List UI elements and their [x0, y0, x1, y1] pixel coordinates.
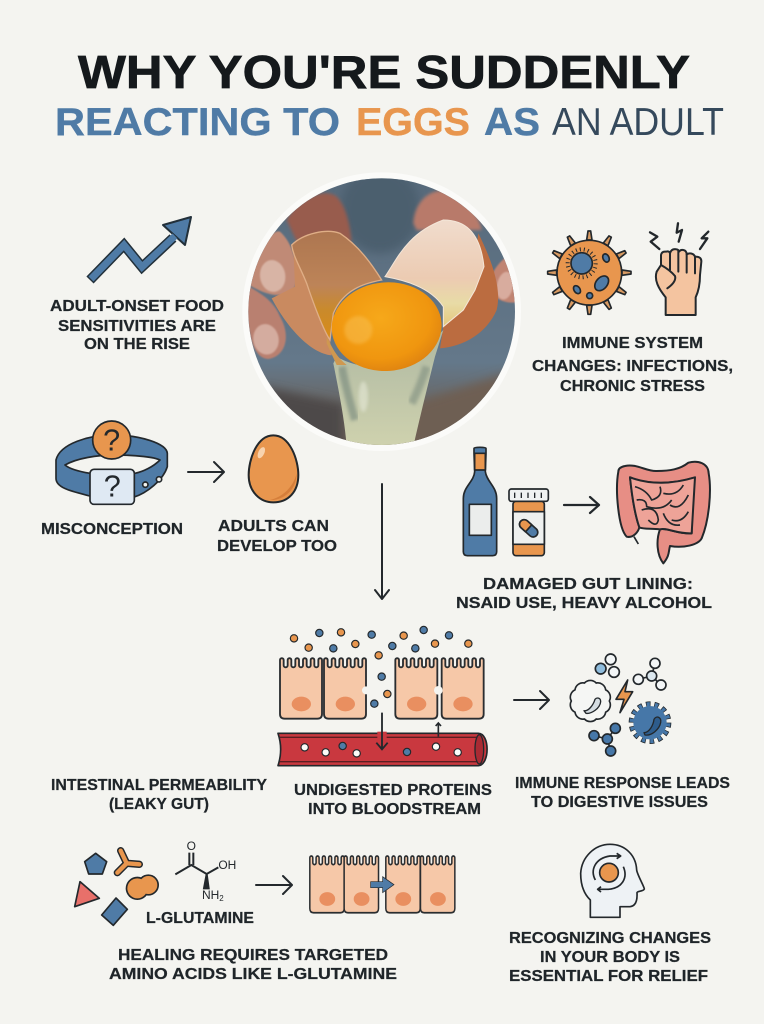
text: recognizing changes — [509, 930, 711, 985]
icon: L-glutamine molecule — [175, 839, 236, 903]
title — [55, 46, 724, 144]
text: healing requires amino acids: AMINO ACIDS LIKE L-GLUTAMINE — [109, 966, 397, 983]
arrow: misconception to egg — [188, 462, 224, 482]
text: adults can develop too — [217, 518, 337, 555]
text: adults can develop too: DEVELOP TOO — [217, 538, 337, 555]
diagram: leaky gut cells and bloodstream — [278, 626, 487, 766]
icon: question-mark wristband — [56, 421, 167, 504]
text: undigested proteins: INTO BLOODSTREAM — [308, 801, 481, 818]
icon: virus — [548, 231, 631, 314]
photo: cracking egg in circle — [242, 167, 523, 453]
text: intestinal permeability: INTESTINAL PERMEABILITY — [51, 777, 268, 794]
arrow: L-glutamine to healed cells — [256, 876, 292, 894]
text: undigested proteins: UNDIGESTED PROTEINS — [294, 782, 492, 799]
icon: head with cycle — [581, 844, 644, 917]
text: immune system changes: CHANGES: INFECTIONS, — [532, 358, 733, 375]
text: recognizing changes: IN YOUR BODY IS — [540, 949, 680, 966]
icon: intestines — [617, 462, 710, 563]
icon: L-glutamine molecule: O — [187, 839, 196, 853]
title: EGGS — [356, 101, 470, 144]
proteins above gut wall — [290, 626, 472, 707]
icon: egg — [249, 435, 298, 502]
arrow: medication to gut — [564, 497, 599, 513]
text: damaged gut lining — [456, 576, 712, 612]
text: intestinal permeability — [51, 777, 268, 813]
text: damaged gut lining: NSAID USE, HEAVY ALCOHOL — [456, 595, 712, 612]
text: L-glutamine label: L-GLUTAMINE — [146, 910, 254, 927]
title: AN ADULT — [552, 101, 724, 144]
icon: pill bottle — [509, 489, 548, 556]
text: adult-onset sensitivities: ON THE RISE — [84, 336, 190, 353]
text: damaged gut lining: DAMAGED GUT LINING: — [483, 576, 693, 593]
text: immune system changes: IMMUNE SYSTEM — [562, 335, 703, 352]
text: adults can develop too: ADULTS CAN — [218, 518, 329, 535]
text: immune response: IMMUNE RESPONSE LEADS — [515, 775, 730, 792]
diagram: healing gut cells — [310, 856, 455, 913]
text: misconception: MISCONCEPTION — [41, 521, 183, 538]
text: recognizing changes: RECOGNIZING CHANGES — [509, 930, 711, 947]
title: REACTING TO — [55, 101, 340, 144]
text: undigested proteins — [294, 782, 492, 818]
arrow: photo down to leaky gut — [375, 484, 389, 599]
text: adult-onset sensitivities: SENSITIVITIES ARE — [58, 318, 216, 335]
text: immune system changes: CHRONIC STRESS — [560, 378, 705, 395]
icon: question-mark wristband: ? — [104, 470, 121, 504]
icon: L-glutamine molecule: OH — [218, 858, 236, 872]
icon: wine bottle — [463, 447, 497, 556]
icon: L-glutamine molecule: 2 — [219, 894, 224, 903]
text: healing requires amino acids: HEALING REQUIRES TARGETED — [118, 947, 388, 964]
title: WHY YOU'RE SUDDENLY — [78, 46, 690, 98]
text: adult-onset sensitivities — [50, 298, 224, 353]
title: AS — [484, 101, 540, 144]
text: adult-onset sensitivities: ADULT-ONSET FOOD — [50, 298, 224, 315]
text: immune response: TO DIGESTIVE ISSUES — [531, 794, 708, 811]
text: intestinal permeability: (LEAKY GUT) — [109, 796, 209, 813]
text: healing requires amino acids — [109, 947, 397, 983]
icon: immune cells — [570, 654, 668, 756]
arrow: leaky gut to immune response — [514, 691, 549, 709]
icon: L-glutamine molecule: NH — [202, 888, 219, 902]
icon: fist with lightning — [650, 223, 708, 315]
text: immune response — [515, 775, 730, 811]
text: immune system changes — [532, 335, 733, 395]
text: recognizing changes: ESSENTIAL FOR RELIEF — [509, 968, 708, 985]
icon: amino acid shapes — [75, 851, 159, 925]
icon: question-mark wristband: ? — [103, 424, 120, 458]
icon: rising trend arrow — [90, 217, 191, 280]
